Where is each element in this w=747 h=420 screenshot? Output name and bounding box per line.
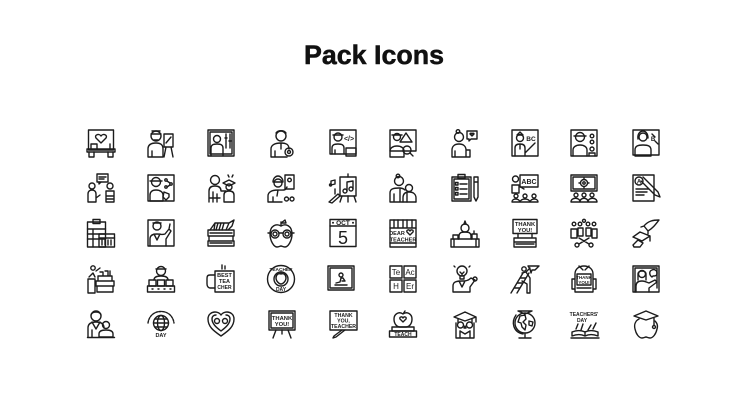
icon: thank you easel board: [269, 311, 295, 338]
icon: framed board with book figure: [328, 266, 354, 290]
icon: screen with gear and students: [571, 175, 597, 202]
icon: teachers day round badge: TEACHER: [269, 267, 293, 273]
icon: thank you sign: YOU!: [518, 228, 532, 234]
title: Pack Icons: [304, 40, 444, 70]
icon: woman with chart board: [633, 130, 659, 156]
icon: two people conversing: [88, 174, 114, 202]
icon: teachers day round badge: [268, 266, 294, 293]
icon: thank you sign: THANK: [515, 222, 536, 228]
icon: thank you backpack: YOU!: [578, 280, 590, 285]
icon: periodic table tiles Te Ac H Er: [390, 266, 416, 292]
icon: teacher with books: [88, 266, 114, 293]
icon: teacher with ABC board and students: [512, 175, 538, 202]
icon: teacher with graduate student: [209, 175, 235, 202]
icon: teachers day open book: DAY: [577, 318, 588, 324]
icon: woman with speech bubble: [452, 130, 477, 157]
icon: clipboard and calendar: [88, 220, 114, 247]
icon grid: [87, 130, 660, 339]
icon: calendar Oct 5: [330, 220, 356, 248]
icon: periodic table tiles Te Ac H Er: H: [393, 282, 399, 291]
icon: apple on teach books: TEACH: [394, 332, 412, 338]
icon: best teacher mug: [207, 265, 234, 292]
icon: thank you teacher note and pencil: THANK: [334, 313, 353, 319]
icon: man with medal: [271, 131, 293, 157]
icon: teacher with ABC board and students: ABC: [521, 179, 537, 186]
icon: best teacher mug: BEST: [217, 273, 232, 279]
icon: teacher with light bulb head: [453, 266, 477, 292]
icon: teachers day open book: [570, 312, 599, 338]
icon: thank you teacher note and pencil: YOU,: [337, 318, 350, 324]
icon: thank you teacher note and pencil: [330, 311, 357, 338]
icon: teachers day open book: TEACHERS': [570, 312, 598, 318]
icon: artist with easel: [148, 131, 173, 157]
icon: calendar Oct 5: OCT: [336, 220, 350, 227]
icon: apple with glasses: [268, 220, 294, 247]
icon: graduate owl with cap: [454, 312, 476, 338]
icon: calendar Oct 5: 5: [338, 228, 348, 248]
icon: teacher with ABC board: [512, 130, 538, 156]
icon: thank you easel board: THANK: [272, 316, 293, 322]
icon: teacher at desk: [451, 221, 479, 247]
icon: teacher with students on screen: [571, 130, 597, 156]
icon: teachers day globe: DAY: [155, 333, 167, 339]
icon: teachers day round badge: DAY: [276, 287, 287, 293]
icon: dear teacher card: DEAR: [389, 231, 405, 237]
icon: thank you easel board: YOU!: [275, 322, 289, 328]
icon: board with heart on desk: [87, 130, 115, 157]
icon: stack of books with pencils: [208, 220, 234, 246]
icon: woman at blackboard: [633, 266, 659, 292]
icon: thank you sign: [513, 220, 537, 247]
icon: teacher with ABC board: BC: [526, 136, 536, 143]
icon: teacher at share board: [148, 175, 174, 201]
icon: dear teacher card: TEACHER: [390, 238, 416, 244]
icon: teacher with code board: [330, 130, 356, 156]
icon: rocket and graduation cap: [633, 220, 659, 247]
icon: apple with graduation cap: [634, 311, 658, 338]
icon: two teachers: [390, 174, 416, 202]
icon: desk globe: [513, 311, 535, 338]
icon: exam paper and pencil: A: [637, 180, 642, 186]
icon: periodic table tiles Te Ac H Er: Te: [392, 268, 401, 277]
icon: heart of pencils: [208, 312, 234, 336]
icon: music notes and easel: [329, 174, 356, 203]
icon: thank you teacher note and pencil: TEACHER: [331, 324, 356, 330]
icon: teacher and three students at desks: [148, 266, 174, 292]
icon: climber on ladder with flag: [511, 266, 539, 293]
icon: periodic table tiles Te Ac H Er: Ac: [405, 268, 415, 277]
icon: exam paper and pencil: [633, 175, 660, 201]
icon: engineer teacher with chart: [268, 175, 294, 202]
icon: teacher at blackboard with tools: [208, 130, 234, 156]
icon: best teacher mug: CHER: [217, 285, 232, 291]
icon: clipboard checklist and pencil: [452, 174, 478, 201]
icon: students and scissors: [571, 219, 597, 247]
icon: woman with chart board: B: [651, 137, 656, 143]
icon: teacher with triangle board: [390, 130, 416, 157]
icon: best teacher mug: TEA: [219, 279, 230, 285]
icon: periodic table tiles Te Ac H Er: Er: [406, 282, 414, 291]
icon: dear teacher card: [389, 220, 416, 247]
icon: teacher and student: [88, 311, 114, 338]
icon: thank you backpack: THANK: [576, 275, 593, 280]
icon: thank you backpack: [572, 266, 596, 292]
icon: teachers day globe: [148, 312, 174, 339]
icon: teacher with pointer at board: [148, 220, 174, 246]
icon: apple on teach books: [390, 311, 416, 338]
icon: teacher with code board: </>: [344, 136, 354, 143]
